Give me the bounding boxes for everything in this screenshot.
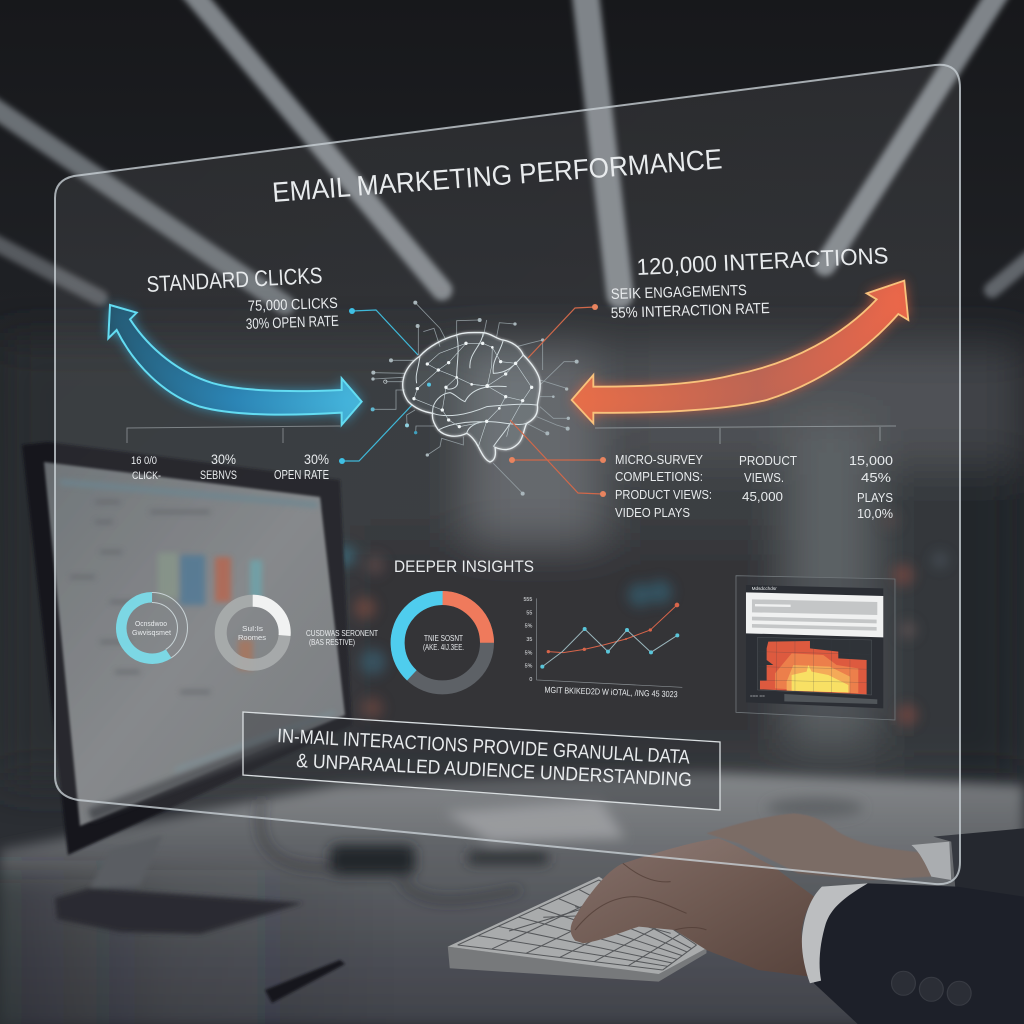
shirt cuff front [802,883,868,983]
desk surface [0,772,1024,1024]
sleeve buttons [892,971,971,1005]
stat text: clicks and open rate [246,295,339,333]
line chart: 35 [526,637,532,643]
front hand [571,838,814,977]
donut: white and grey: Roomes [238,633,266,642]
shirt cuff back [911,842,951,880]
heatmap panel [736,576,895,720]
stat text: engagements [611,282,770,322]
stat text: engagements: SEIK ENGAGEMENTS [611,282,747,303]
blurred screen content [60,482,335,815]
neural network lines [414,343,532,447]
title: EMAIL MARKETING PERFORMANCE [271,143,723,208]
ceiling light bars [0,0,1024,305]
line chart: 5% [525,664,533,670]
glass panel [55,65,960,884]
donut: cyan [110,586,194,670]
panel: deeper insights [110,557,895,720]
metric list: right: PRODUCT VIEWS: [615,487,712,502]
brain outline [403,333,540,462]
suit sleeve front [814,883,1024,1024]
line chart: MGIT BKIKED2D W iOTAL, /ING 45 3023 [544,685,678,699]
hands on keyboard [448,813,1024,1024]
monitor stand [55,835,303,934]
donut: segmented [379,580,505,706]
stat text: clicks and open rate: 75,000 CLICKS [248,295,338,315]
monitor body [22,442,352,855]
knuckle folds [575,863,706,930]
metric columns: left: 30% [304,451,329,467]
pen [265,960,345,1003]
metric list: right [615,452,893,521]
label: customer sentiment [306,629,378,647]
inner folds [416,333,537,447]
heading: standard clicks: STANDARD CLICKS [146,263,323,297]
back hand through glass [706,813,931,880]
brain outline glow [403,333,540,462]
brain network [371,301,579,496]
axis: right [595,426,896,444]
metric list: right: 45,000 [742,489,783,504]
label: customer sentiment: (BAS RESTIVE) [309,638,355,647]
keyboard [448,877,706,982]
paper and desk objects [260,798,863,900]
metric list: right: 10,0% [857,506,893,521]
stat text: clicks and open rate: 30% OPEN RATE [246,313,339,333]
monitor screen [44,462,345,826]
metric columns: left: OPEN RATE [274,468,329,482]
donut: segmented: (AKE. 4IJ.3EE. [423,643,464,652]
callout: bottom statement: & UNPARAALLED AUDIENCE UNDERSTANDING [296,750,692,791]
arrow: orange [572,281,908,423]
line chart: 55 [526,610,532,616]
callout: bottom statement [243,712,720,810]
metric list: right: VIEWS. [744,470,784,485]
metric list: right: VIDEO PLAYS [615,505,690,520]
bokeh lights [334,511,948,726]
metric columns: left: SEBNVS [200,468,237,482]
heatmap [757,637,872,695]
donut: white and grey [221,601,285,665]
suit sleeve back [933,828,1024,900]
monitor behind the glass [22,442,352,934]
metric list: right: PLAYS [857,490,893,505]
panel: standard clicks [108,263,418,482]
circuit lines [373,303,577,493]
heading: deeper insights: DEEPER INSIGHTS [394,557,534,576]
line chart: 0 [529,677,532,683]
donut: segmented: TNIE SOSNT [424,634,463,643]
label: customer sentiment: CUSDWAS SERONENT [306,629,378,638]
line chart: 555 [523,597,532,603]
metric columns: left: CLICK- [132,470,161,482]
donut: white and grey: SuI:Is [242,624,263,633]
donut: cyan: Gwvisqsmet [132,628,172,637]
mid background blurred office [0,340,1024,780]
donut: cyan: Ocnsdwoo [135,619,167,628]
axis: left [127,426,340,443]
line chart [523,597,682,699]
stat text: engagements: 55% INTERACTION RATE [611,300,770,322]
panel: interactions [509,242,908,521]
heatmap panel: Mdsdcchdsr [752,586,777,591]
metric list: right: PRODUCT [739,453,797,468]
callout: bottom statement: IN-MAIL INTERACTIONS PROVIDE GRANULAL DATA [277,725,690,769]
line chart: 5% [525,650,533,656]
white report card [746,592,883,637]
line chart: 5% [525,624,533,630]
connectors: left [342,310,418,461]
metric columns: left [131,451,329,482]
metric list: right: MICRO-SURVEY [615,452,703,467]
connectors: right [510,307,603,494]
metric list: right: 45% [861,470,891,485]
heading: 120,000 interactions: 120,000 INTERACTIONS [636,242,889,280]
metric list: right: COMPLETIONS: [615,469,703,484]
metric list: right: 15,000 [849,453,893,468]
arrow: blue [108,305,362,425]
metric columns: left: 16 0/0 [131,455,157,467]
metric columns: left: 30% [211,451,236,467]
heatmap panel: === == [750,693,765,698]
